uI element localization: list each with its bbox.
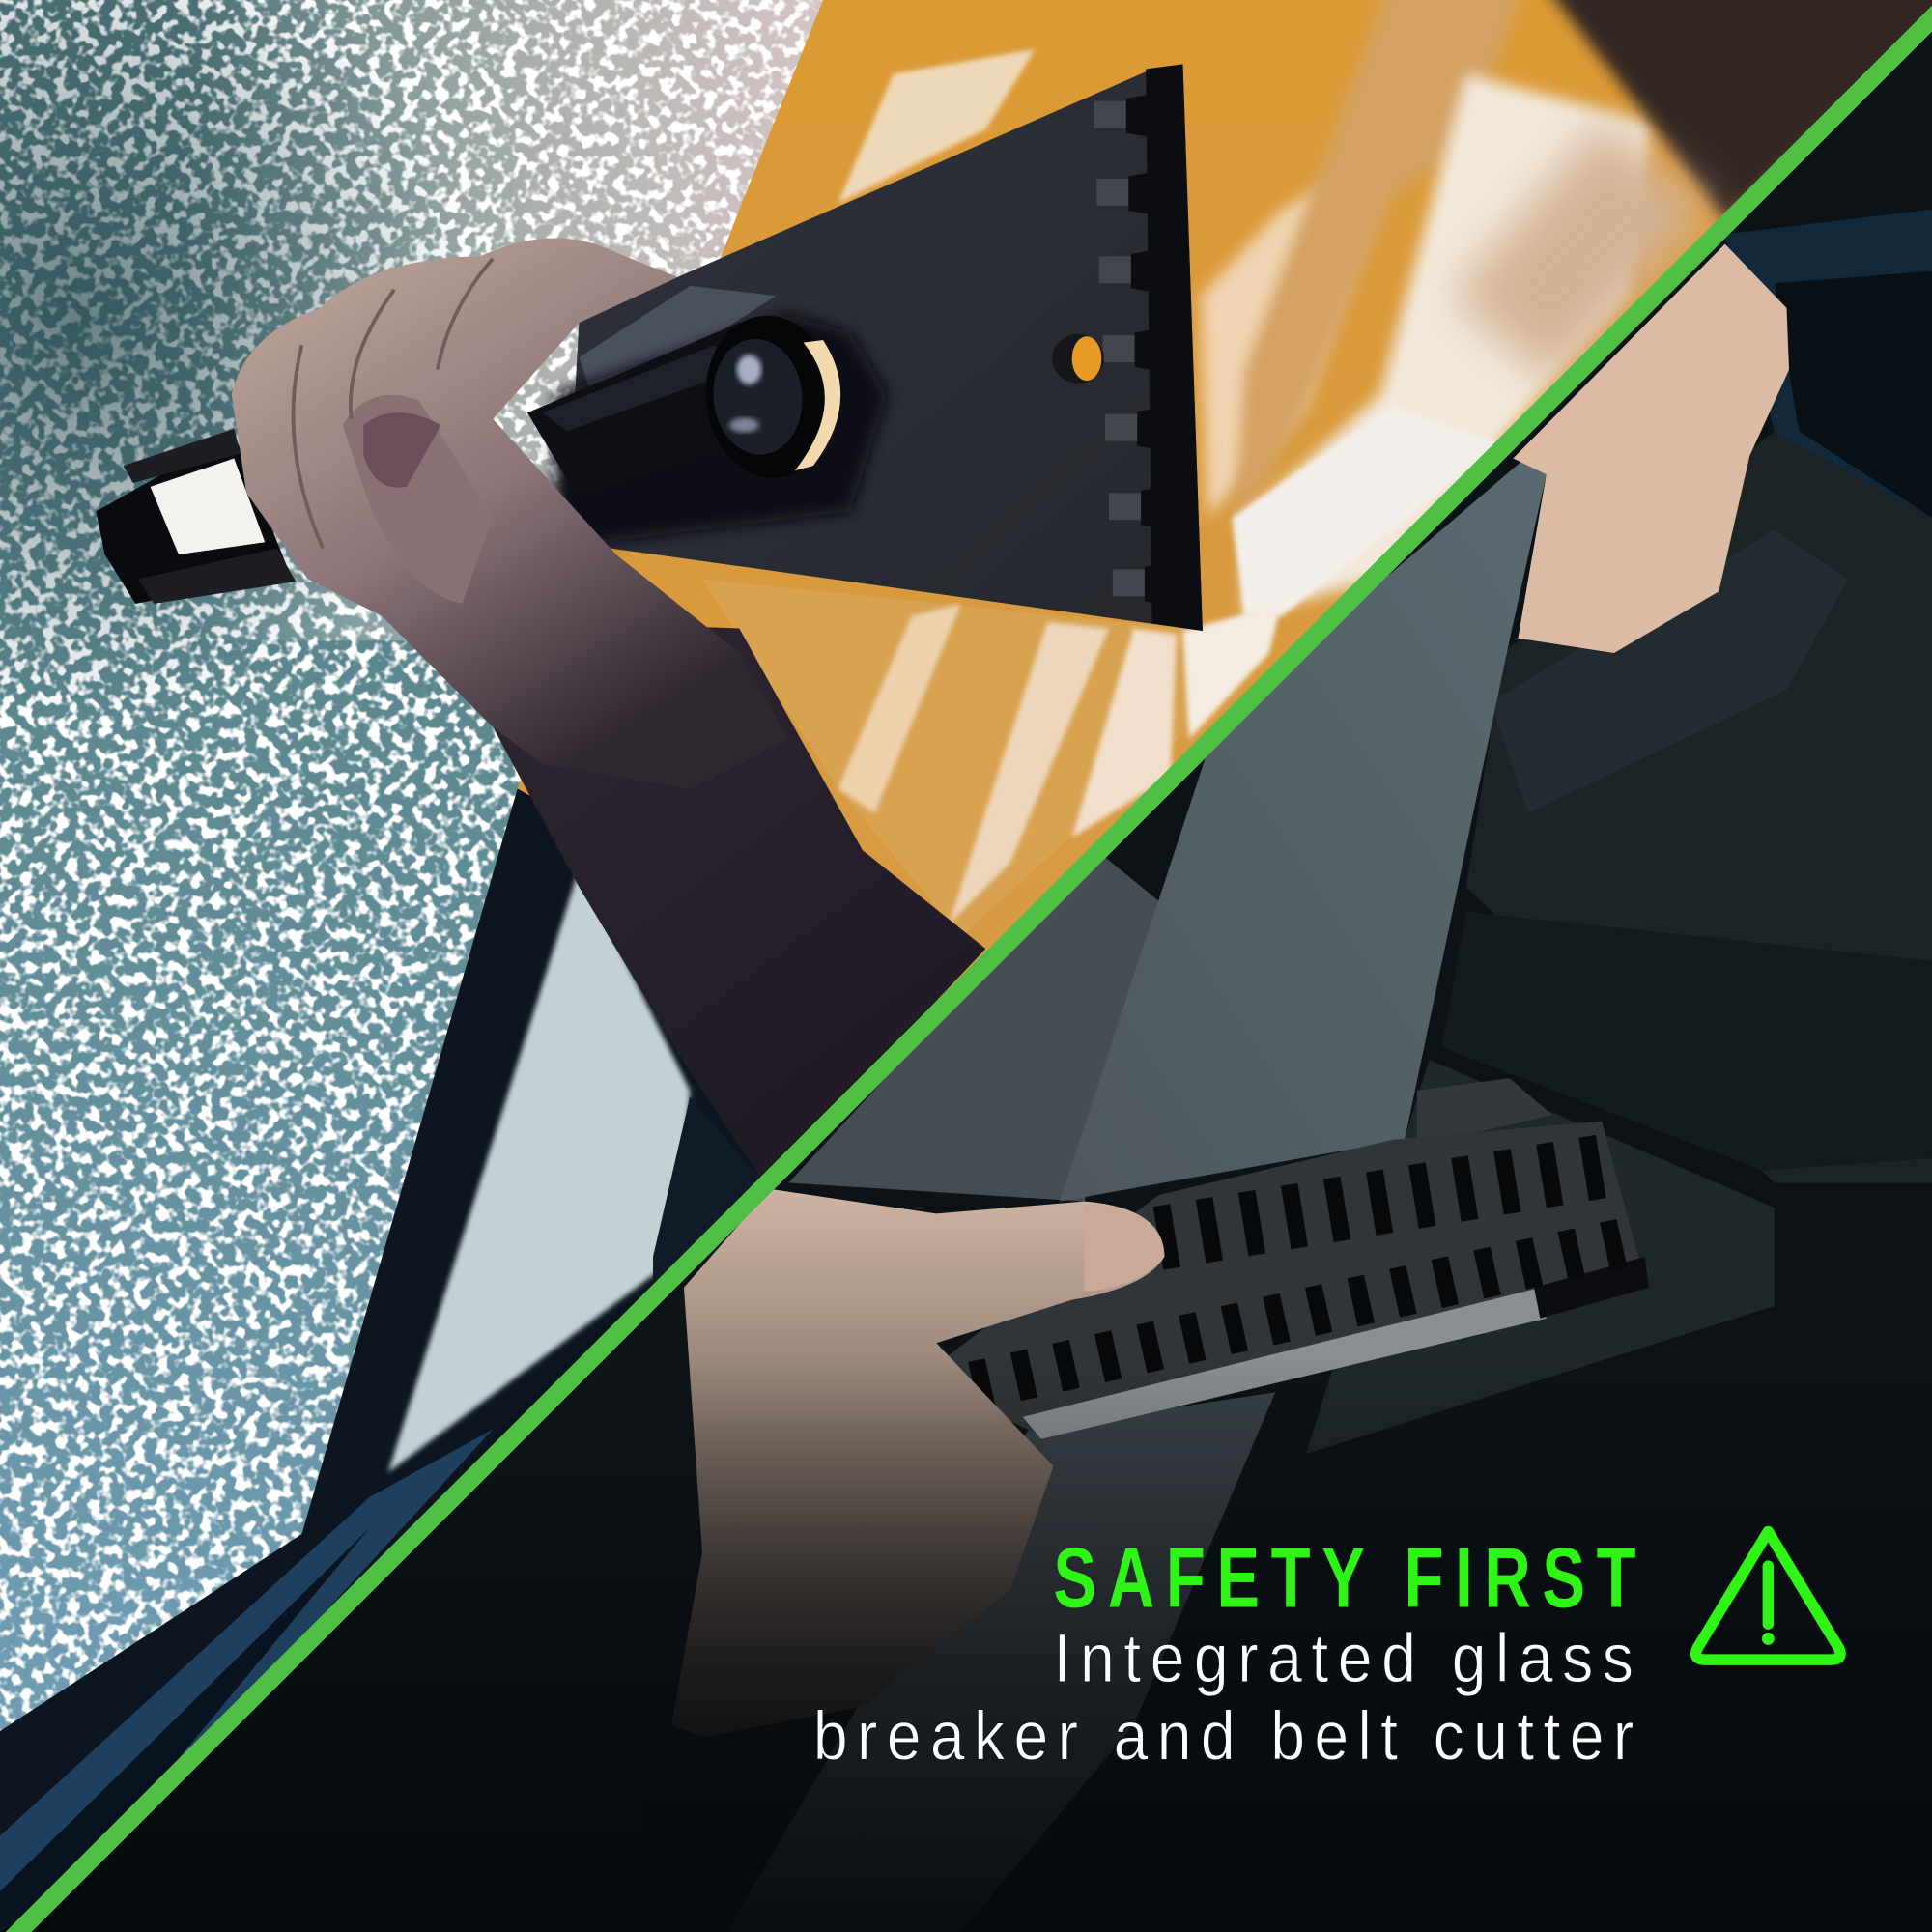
beard and face (1528, 0, 1932, 222)
seat belt lower (768, 1393, 1275, 1862)
bright window corner (1749, 43, 1932, 271)
text: breaker and belt cutter: breaker and belt cutter (813, 1697, 1634, 1775)
headline and text (813, 1529, 1636, 1775)
seat belt upper (1060, 456, 1547, 1202)
text: integrated glass: Integrated glass (1054, 1620, 1634, 1697)
ice scraper blade (554, 64, 1203, 631)
icon: warning triangle (1696, 1531, 1840, 1660)
breaker tip with white tube (96, 429, 296, 604)
car interior background (354, 0, 1932, 1355)
shattered glass (0, 0, 863, 1749)
window frame and outside view (0, 788, 760, 1932)
dark jacket background (230, 32, 1932, 1733)
flashlight (527, 315, 840, 478)
ribbed tool handle (949, 1078, 1649, 1439)
dark fade over lower area (0, 1355, 1932, 1932)
seat upholstery (788, 850, 1164, 1202)
gripping hand (232, 238, 736, 765)
lower hand holding handle (671, 1189, 1164, 1737)
hanging hole (1052, 334, 1104, 384)
heading: safety first: SAFETY FIRST (1054, 1529, 1636, 1625)
forearm (382, 616, 985, 1182)
upper hand pulling belt (1513, 244, 1789, 653)
